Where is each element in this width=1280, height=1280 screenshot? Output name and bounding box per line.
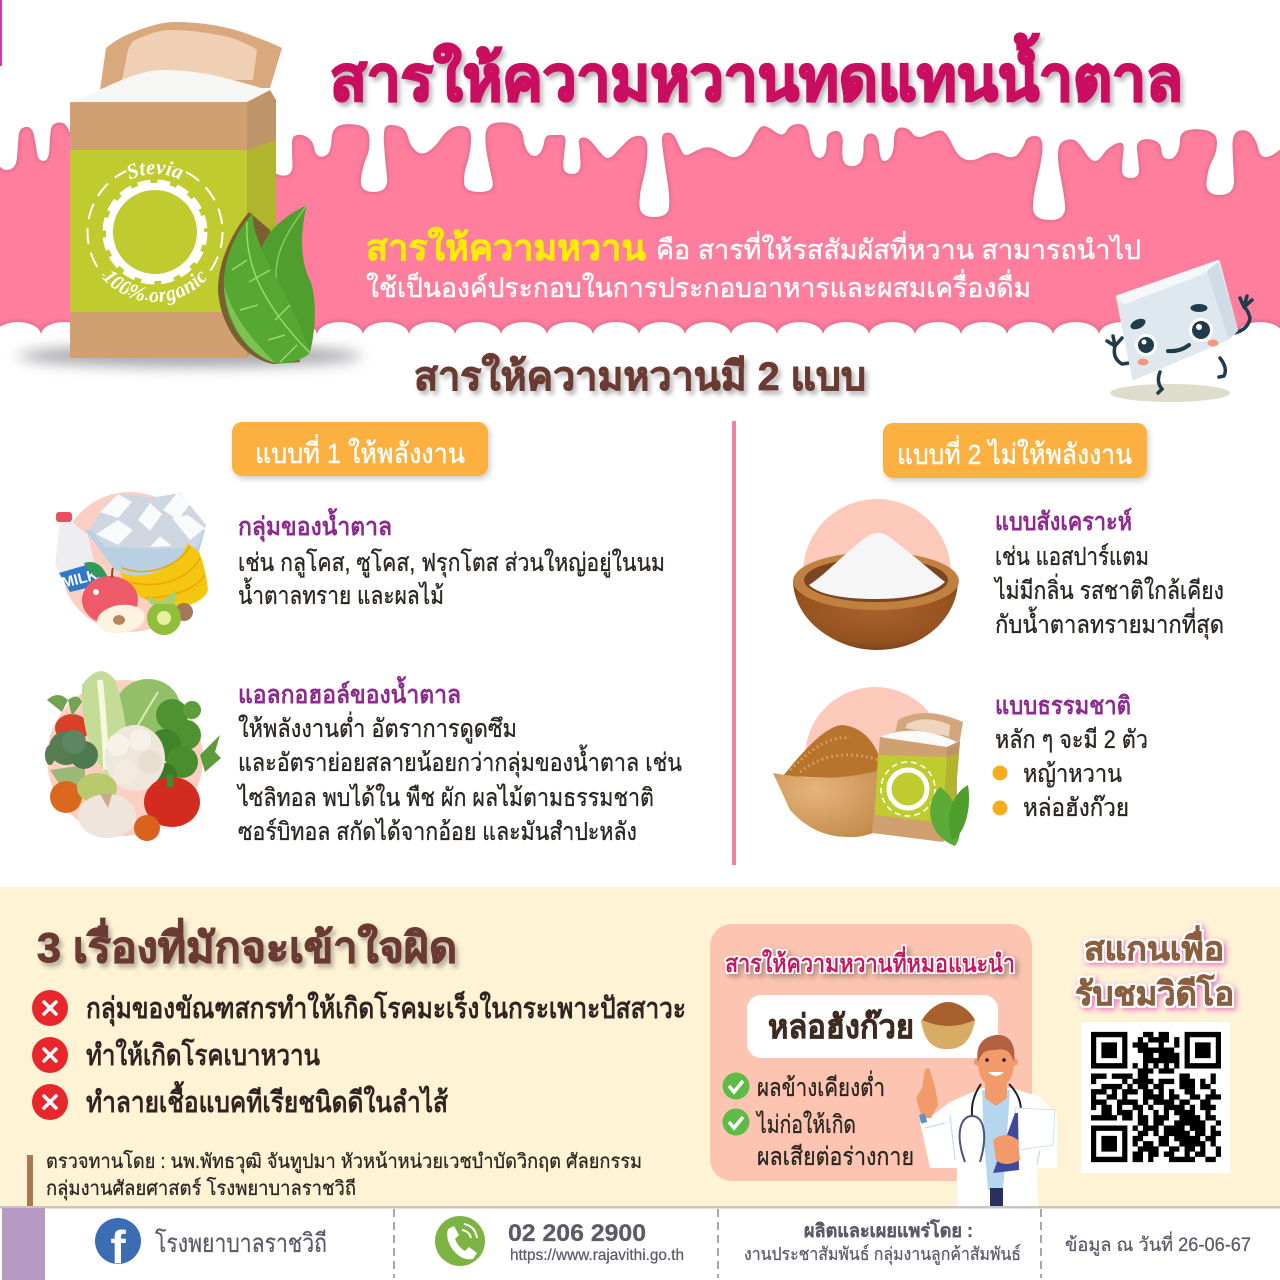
icon: sugar cube mascot <box>1107 262 1252 402</box>
icon: sugar, milk and fruit: MILK <box>60 566 100 592</box>
contact <box>508 1220 684 1264</box>
text: sugar alcohols group: ซอร์บิทอล สกัดได้จากอ้อย และมันสำปะหลัง <box>238 817 637 846</box>
benefit list: ไม่ก่อให้เกิด <box>755 1110 856 1139</box>
icon: stevia sugar bag: Stevia <box>126 161 184 180</box>
icon: sugar, milk and fruit <box>55 492 208 636</box>
icon: facebook <box>95 1218 141 1273</box>
text: sugar alcohols group: ให้พลังงานต่ำ อัตราการดูดซึม <box>238 711 517 744</box>
text: sugars group: กลุ่มของน้ำตาล <box>238 507 392 543</box>
reviewer note <box>27 1150 642 1207</box>
text: natural sweeteners: แบบธรรมชาติ <box>995 692 1131 720</box>
misconception list: กลุ่มของขัณฑสกรทำให้เกิดโรคมะเร็งในกระเพาะปัสสาวะ <box>86 990 686 1026</box>
misconception list: ทำให้เกิดโรคเบาหวาน <box>86 1037 320 1072</box>
text: sugar alcohols group: แอลกอฮอล์ของน้ำตาล <box>238 675 461 709</box>
pill: type 2: แบบที่ 2 ไม่ให้พลังงาน <box>897 435 1132 470</box>
definition text: ใช้เป็นองค์ประกอบในการประกอบอาหารและผสมเครื่องดื่ม <box>366 269 1031 303</box>
benefit list: ผลข้างเคียงต่ำ <box>757 1070 885 1102</box>
misconception list <box>32 990 686 1120</box>
icon: bowl of white sweetener <box>793 499 959 650</box>
icon: phone <box>435 1216 485 1266</box>
text: sugars group <box>238 507 665 610</box>
icon: stevia sugar bag <box>16 22 364 376</box>
recommended product: หล่อฮังก๊วย <box>768 1008 914 1045</box>
publisher: ผลิตและเผยแพร่โดย : <box>804 1219 973 1242</box>
scan prompt <box>1075 925 1234 1012</box>
pill: type 2 <box>883 423 1147 478</box>
heading: three misconceptions: 3 เรื่องที่มักจะเข้าใจผิด <box>37 918 457 971</box>
text: natural sweeteners: หล่อฮังก๊วย <box>1023 794 1129 822</box>
title: สารให้ความหวานทดแทนน้ำตาล <box>330 33 1183 114</box>
reviewer note: กลุ่มงานศัลยศาสตร์ โรงพยาบาลราชวิถี <box>46 1177 356 1201</box>
panel: cream lower section <box>0 887 1280 1207</box>
reviewer note: ตรวจทานโดย : นพ.พัทธวุฒิ จันทูปมา หัวหน้าหน่วยเวชบำบัดวิกฤต ศัลยกรรม <box>46 1150 642 1174</box>
panel: footer <box>0 1206 1280 1280</box>
text: sugar alcohols group: ไซลิทอล พบได้ใน พืช ผัก ผลไม้ตามธรรมชาติ <box>236 783 654 812</box>
definition text: สารให้ความหวาน <box>366 226 646 268</box>
publisher <box>744 1219 1021 1265</box>
text: natural sweeteners <box>992 692 1148 822</box>
panel: pink dripping banner <box>0 122 1280 335</box>
icon: vegetables <box>45 671 221 841</box>
text: synthetic sweeteners: กับน้ำตาลทรายมากที่สุด <box>995 606 1224 640</box>
panel: doctor recommendation <box>710 924 1032 1181</box>
pill: type 1: แบบที่ 1 ให้พลังงาน <box>255 434 465 469</box>
text: synthetic sweeteners: เช่น แอสปาร์แตม <box>995 543 1149 571</box>
facebook page name: โรงพยาบาลราชวิถี <box>155 1228 327 1258</box>
icon: stevia leaves <box>218 205 315 364</box>
contact: 02 206 2900 <box>508 1220 646 1247</box>
scan prompt: สแกนเพื่อ <box>1084 925 1224 967</box>
icon: stevia sugar bag: 100% organic <box>102 271 206 305</box>
publisher: งานประชาสัมพันธ์ กลุ่มงานลูกค้าสัมพันธ์ <box>744 1244 1021 1265</box>
pill: type 1 <box>232 422 488 476</box>
corner accent <box>0 0 2 66</box>
text: synthetic sweeteners: แบบสังเคราะห์ <box>995 507 1132 536</box>
text: synthetic sweeteners: ไม่มีกลิ่น รสชาติใกล้เคียง <box>993 573 1224 605</box>
text: sugar alcohols group: และอัตราย่อยสลายน้อยกว่ากลุ่มของน้ำตาล เช่น <box>238 744 682 778</box>
benefit list <box>722 1070 914 1171</box>
icon: brown sugar and stevia pack <box>773 687 969 846</box>
text: sugar alcohols group <box>236 675 682 846</box>
divider <box>732 421 736 865</box>
recommended product <box>747 995 998 1058</box>
icon: facebook: f <box>110 1221 126 1273</box>
definition text: คือ สารที่ให้รสสัมผัสที่หวาน สามารถนำไป <box>656 231 1141 265</box>
QR code <box>1081 1022 1230 1173</box>
text: sugars group: น้ำตาลทราย และผลไม้ <box>238 577 444 610</box>
text: natural sweeteners: หลัก ๆ จะมี 2 ตัว <box>995 726 1148 754</box>
scan prompt: รับชมวิดีโอ <box>1075 974 1234 1012</box>
heading: two types: สารให้ความหวานมี 2 แบบ <box>414 353 866 399</box>
benefit list: ผลเสียต่อร่างกาย <box>757 1143 914 1171</box>
misconception list: ทำลายเชื้อแบคทีเรียชนิดดีในลำไส้ <box>86 1080 448 1119</box>
text: synthetic sweeteners <box>993 507 1224 640</box>
text: natural sweeteners: หญ้าหวาน <box>1023 760 1122 788</box>
definition text <box>366 226 1141 303</box>
contact: https://www.rajavithi.go.th <box>510 1247 684 1264</box>
illustration: doctor <box>916 1035 1057 1207</box>
data date: ข้อมูล ณ วันที่ 26-06-67 <box>1065 1231 1251 1256</box>
text: sugars group: เช่น กลูโคส, ซูโคส, ฟรุกโตส ส่วนใหญ่อยู่ในนม <box>238 548 665 578</box>
panel heading: สารให้ความหวานที่หมอแนะนำ <box>725 946 1015 978</box>
